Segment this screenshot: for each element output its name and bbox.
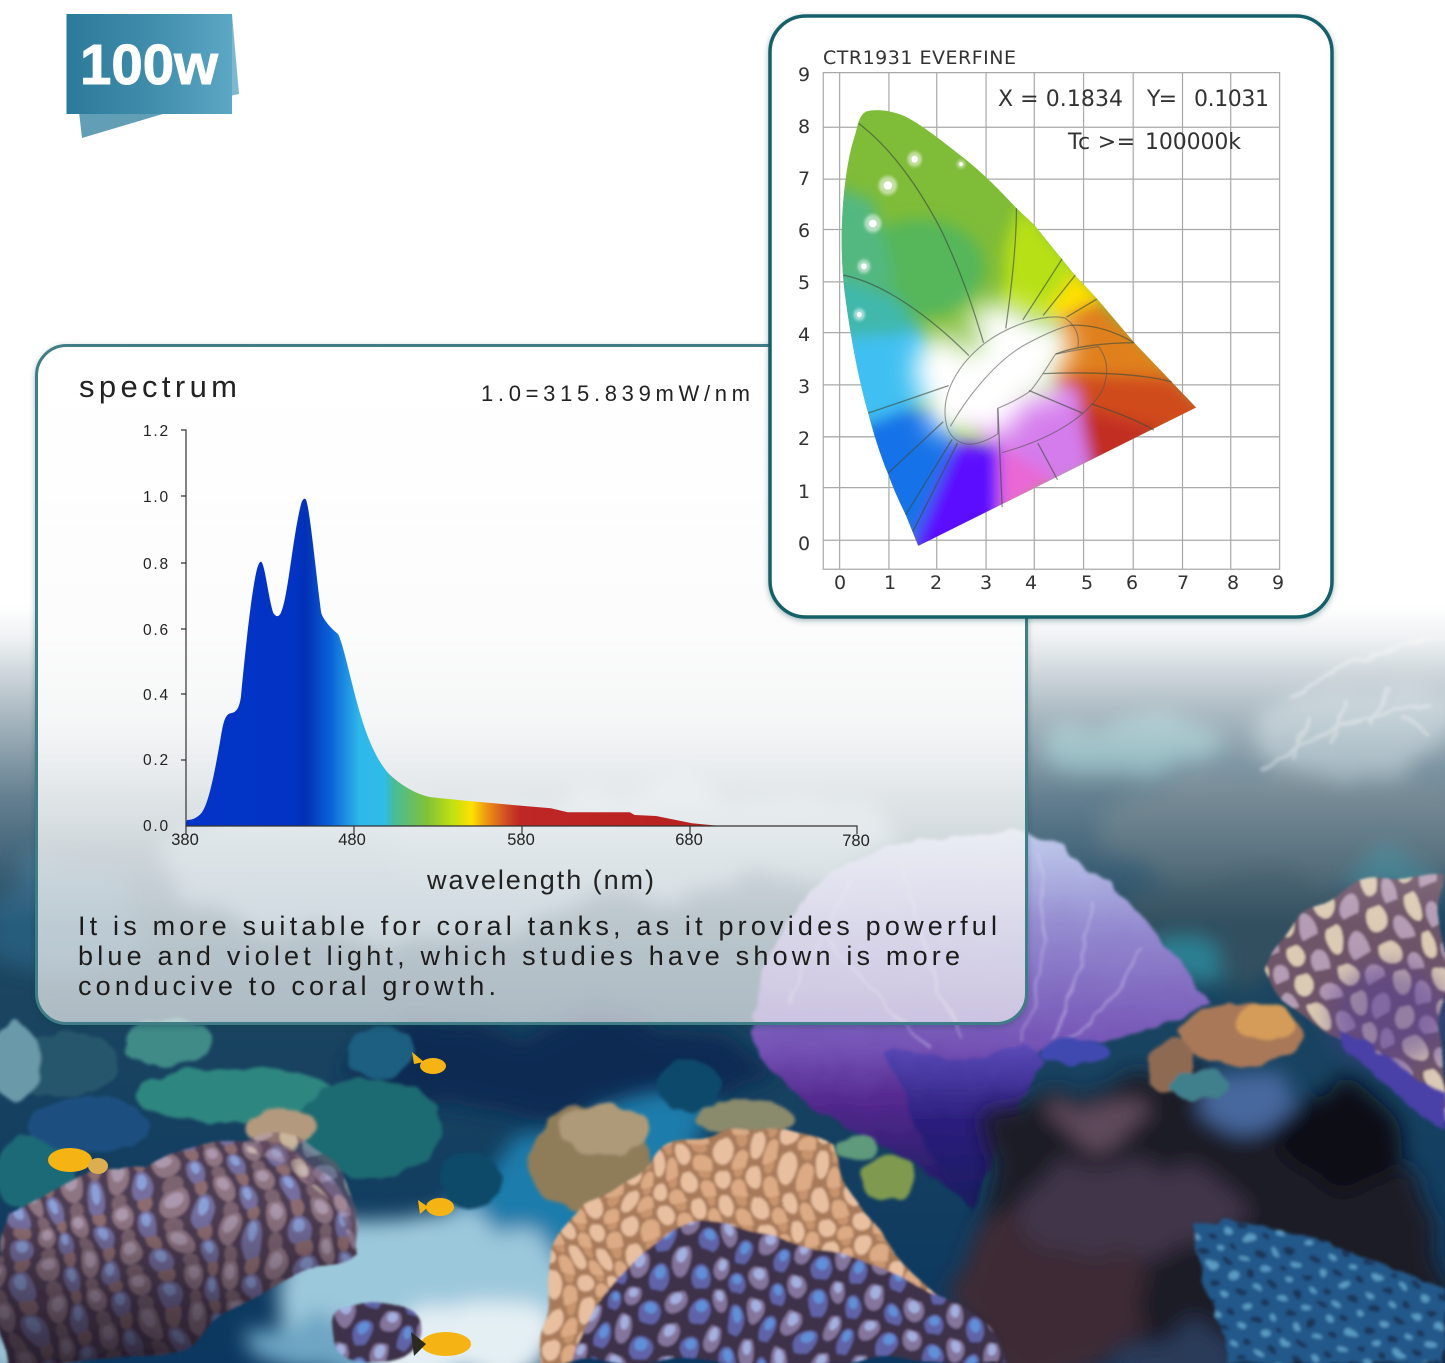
x axis labels (171, 831, 870, 850)
deep water band (340, 770, 1445, 1110)
horseshoe colour gamut (842, 110, 1196, 546)
y axis labels: 2 (798, 428, 810, 450)
x axis labels: 3 (980, 572, 992, 594)
x axis labels: 580 (507, 831, 535, 849)
x axis labels (834, 572, 1284, 594)
y axis labels: 1.0 (143, 489, 170, 506)
scale note: 1.0=315.839mW/nm (481, 381, 750, 406)
y axis labels: 9 (798, 64, 810, 86)
y axis labels: 6 (798, 220, 810, 242)
axis title: wavelength (nm) (426, 865, 654, 895)
colour coordinates readout: X = 0.1834 (998, 87, 1123, 112)
colour coordinates readout (998, 87, 1269, 155)
x axis labels: 9 (1272, 572, 1284, 594)
white haze fading the scene into the page (0, 605, 1445, 925)
y axis labels: 0.6 (143, 622, 170, 639)
y axis labels: 0 (798, 533, 810, 555)
description text (78, 911, 997, 1001)
yellow fish (48, 1052, 471, 1356)
panel: CIE chromaticity (770, 16, 1332, 617)
small coral on sand (333, 1303, 423, 1363)
y axis labels (143, 423, 170, 835)
left mauve coral (0, 1127, 360, 1363)
chart: spectral power distribution (143, 423, 870, 895)
blue textured coral, lower right (1190, 1222, 1445, 1363)
MacAdam ellipses (945, 317, 1107, 453)
x axis labels: 6 (1126, 572, 1138, 594)
bright water and sand floor (0, 1100, 720, 1363)
y axis labels: 4 (798, 324, 810, 346)
faint branching coral, upper right (1262, 640, 1445, 770)
description text: blue and violet light, which studies have shown is more (78, 941, 960, 971)
y axis labels: 0.2 (143, 752, 170, 769)
central peach and mauve coral (540, 1133, 1005, 1363)
x axis labels: 1 (884, 572, 896, 594)
background reef silhouettes, upper water (0, 680, 1445, 985)
y axis labels: 8 (798, 116, 810, 138)
gamut locus lines (843, 123, 1172, 532)
x axis labels: 7 (1177, 572, 1189, 594)
badge: 100w (66, 14, 239, 138)
chromaticity grid (823, 73, 1280, 569)
panel: spectrum (36, 346, 1026, 1024)
LED bright spots (854, 152, 965, 321)
y axis labels: 0.8 (143, 556, 170, 573)
colour coordinates readout: 0.1031 (1194, 87, 1269, 112)
purple fan coral (752, 832, 1210, 1208)
orange coral cluster (1148, 1003, 1302, 1099)
x axis labels: 380 (171, 831, 199, 849)
y axis labels: 0.0 (143, 818, 170, 835)
x axis labels: 2 (930, 572, 942, 594)
y axis labels: 5 (798, 272, 810, 294)
colour coordinates readout: 100000k (1145, 130, 1241, 155)
x axis labels: 0 (834, 572, 846, 594)
y axis labels (798, 64, 810, 555)
front dark fan (886, 1045, 1046, 1208)
colour coordinates readout: Y= (1146, 87, 1177, 112)
x axis labels: 5 (1081, 572, 1093, 594)
tan dome corals (244, 1100, 795, 1215)
x axis labels: 8 (1227, 572, 1239, 594)
y axis labels: 7 (798, 168, 810, 190)
chart title: CTR1931 EVERFINE (823, 47, 1016, 69)
small blue coral (1040, 1038, 1110, 1066)
y axis labels: 1 (798, 481, 810, 503)
badge: 100w: 100w (80, 33, 219, 97)
axes and ticks (181, 430, 857, 834)
y axis labels: 0.4 (143, 687, 170, 704)
description text: conducive to coral growth. (78, 971, 496, 1001)
dark rock and deep reef, lower right (955, 1070, 1445, 1363)
y axis labels: 1.2 (143, 423, 170, 440)
x axis labels: 780 (842, 832, 870, 850)
right lilac and tan coral (1262, 880, 1445, 1130)
colour coordinates readout: Tc >= (1067, 130, 1135, 155)
x axis labels: 480 (338, 831, 366, 849)
y axis labels: 3 (798, 376, 810, 398)
x axis labels: 4 (1025, 572, 1037, 594)
green and teal corals, left (0, 1018, 722, 1215)
spectrum area (186, 499, 721, 826)
heading: spectrum: spectrum (79, 369, 237, 404)
description text: It is more suitable for coral tanks, as it provides powerful (78, 911, 997, 941)
x axis labels: 680 (675, 831, 703, 849)
